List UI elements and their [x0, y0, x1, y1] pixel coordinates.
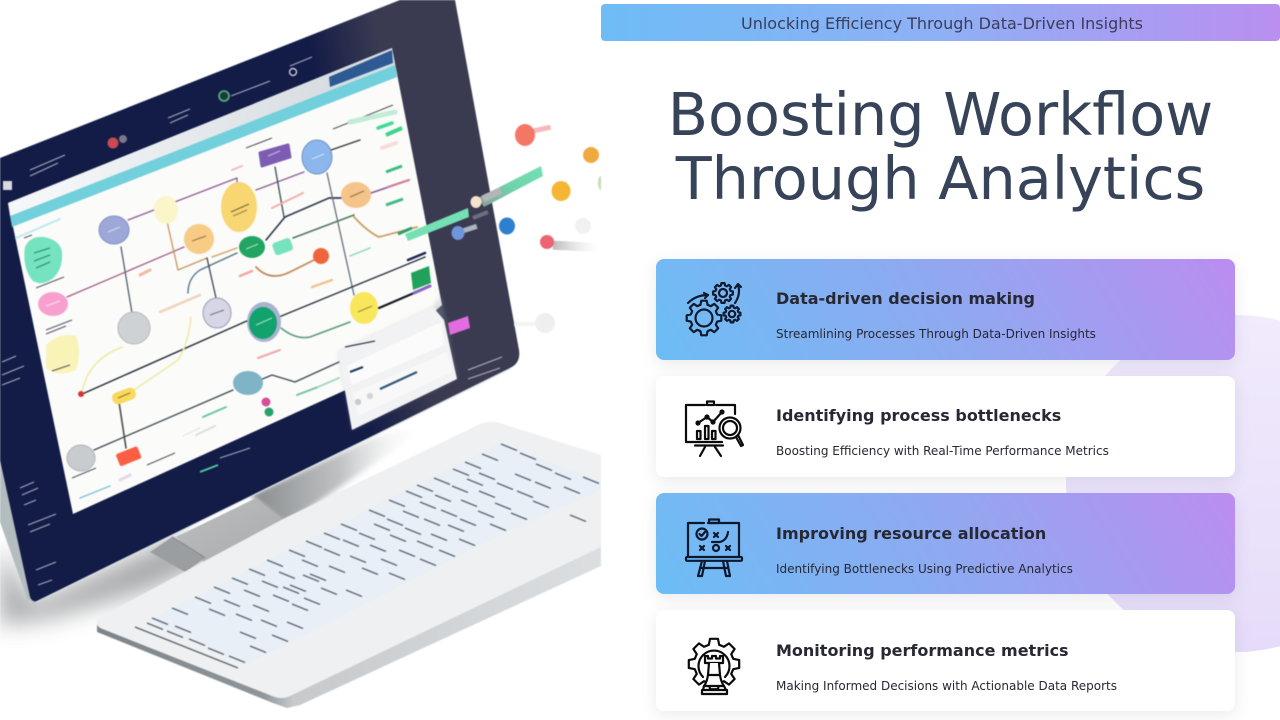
workflow nodes	[24, 128, 431, 471]
screen small labels	[24, 105, 393, 478]
node inner labels	[34, 151, 372, 398]
icon: strategy board on easel	[684, 518, 744, 578]
header banner: Unlocking Efficiency Through Data-Driven Insights	[741, 14, 1143, 33]
card description: Boosting Efficiency with Real-Time Performance Metrics	[776, 444, 1109, 458]
card: improving resource allocation	[656, 493, 1235, 594]
pale screen accents	[16, 112, 396, 498]
card heading: Identifying process bottlenecks	[776, 406, 1061, 425]
icon: gears with arrows	[686, 282, 742, 336]
card description: Identifying Bottlenecks Using Predictive Analytics	[776, 562, 1073, 576]
decorative lavender circle	[1066, 315, 1280, 652]
title: Through Analytics	[676, 144, 1205, 213]
card description: Streamlining Processes Through Data-Driven Insights	[776, 327, 1096, 341]
dots	[515, 124, 535, 146]
monitor stand	[150, 498, 285, 572]
card heading: Improving resource allocation	[776, 524, 1046, 543]
card: monitoring performance metrics	[656, 610, 1235, 711]
card: identifying process bottlenecks	[656, 376, 1235, 477]
floating data dots and streaks	[405, 124, 604, 335]
keyboard side edge	[97, 540, 601, 708]
tails	[533, 125, 551, 133]
title	[668, 80, 1213, 213]
dashboard screen	[8, 48, 442, 514]
keyboard top surface	[96, 422, 601, 698]
keyboard	[96, 422, 601, 708]
bezel small labels	[2, 57, 502, 585]
title: Boosting Workflow	[668, 80, 1213, 149]
key legends	[135, 444, 599, 668]
card: data-driven decision making	[656, 259, 1235, 360]
card heading: Data-driven decision making	[776, 289, 1035, 308]
floating analytics panel	[338, 295, 457, 430]
bezel status icons	[3, 68, 296, 472]
dashboard header band	[8, 48, 395, 216]
illustration: desktop computer with workflow dashboard	[0, 0, 602, 708]
card description: Making Informed Decisions with Actionable Data Reports	[776, 679, 1117, 693]
card heading: Monitoring performance metrics	[776, 641, 1069, 660]
magenta streak	[448, 316, 470, 335]
key field	[149, 443, 601, 665]
header banner	[601, 4, 1280, 41]
icon: chess rook inside gear	[688, 638, 740, 696]
mint streak	[405, 208, 469, 241]
icon: presentation board with magnifier	[684, 400, 744, 458]
workflow connector lines	[67, 140, 430, 450]
monitor ground shadows	[0, 425, 430, 625]
monitor bezel	[0, 0, 519, 603]
